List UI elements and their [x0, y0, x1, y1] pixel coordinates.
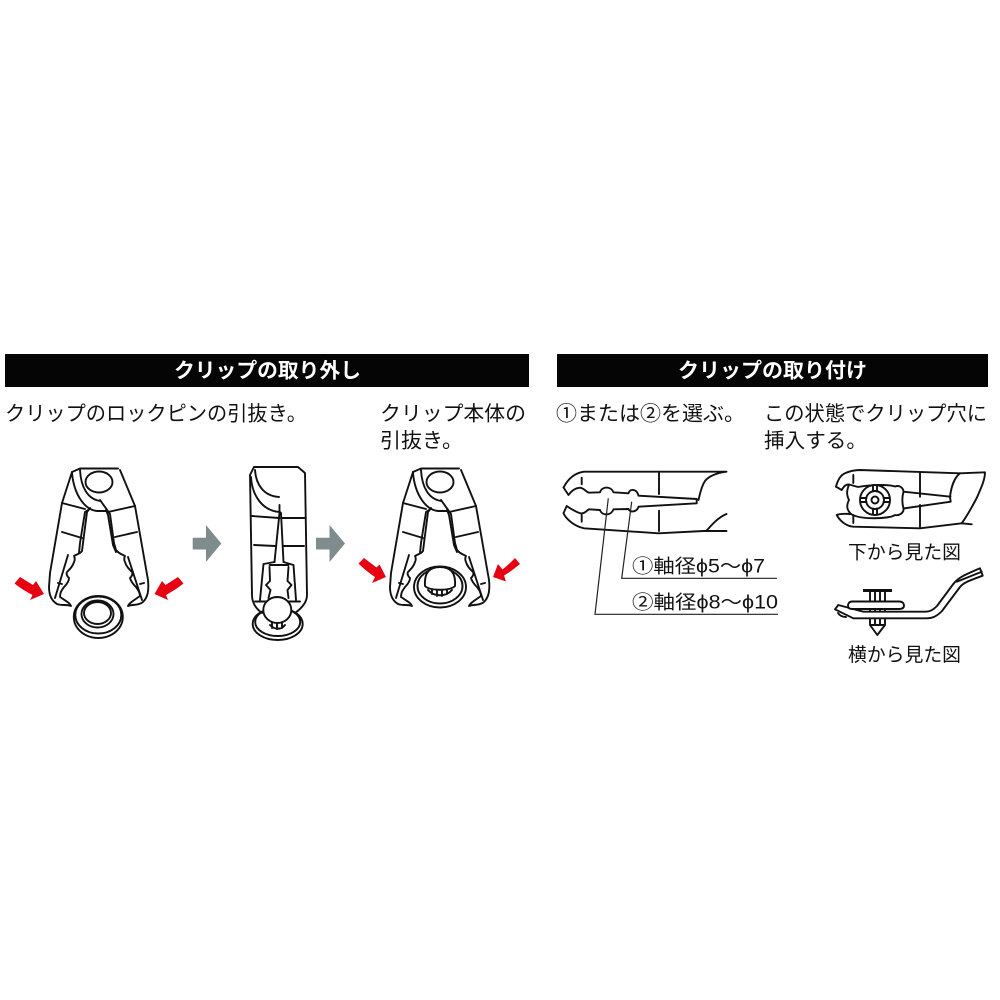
header: clip removal — [5, 354, 529, 387]
text: insert in clip hole — [764, 402, 987, 452]
arrow: red left, plier 3 — [358, 558, 386, 583]
illustration: open pliers with clip ring — [49, 468, 148, 638]
illustration: closed pliers pulling lock pin — [250, 467, 307, 640]
arrow: red right, plier 1 — [154, 577, 184, 600]
icon: clip body — [414, 566, 466, 608]
text: step 1 pull lock pin: クリップのロックピンの引抜き。 — [5, 402, 307, 426]
text: step 2 pull clip body — [380, 402, 526, 452]
text: choose 1 or 2: ①または②を選ぶ。 — [556, 402, 745, 426]
header: clip attachment — [557, 354, 988, 387]
label: diameter 2: ②軸径ϕ8～ϕ10 — [632, 592, 778, 614]
label: view from side: 横から見た図 — [848, 644, 961, 666]
text: insert in clip hole: 挿入する。 — [764, 430, 867, 452]
illustration: view from side — [835, 568, 983, 635]
arrow: red left, plier 1 — [14, 577, 44, 600]
icon: clip ring — [74, 596, 123, 638]
illustration: view from below — [836, 470, 985, 528]
header: clip removal: クリップの取り外し — [174, 360, 361, 382]
icon: clip ring under pliers — [253, 597, 303, 640]
illustration: open pliers pulling clip body — [390, 468, 489, 608]
arrow: grey step arrow 2 — [316, 525, 345, 562]
text: insert in clip hole: この状態でクリップ穴に — [764, 402, 987, 426]
arrow: red right, plier 3 — [493, 558, 520, 582]
text: step 2 pull clip body: 引抜き。 — [380, 430, 463, 452]
label: view from below: 下から見た図 — [848, 542, 961, 564]
icon: clip head from below — [860, 485, 890, 515]
label: diameter 1: ①軸径ϕ5～ϕ7 — [632, 556, 765, 578]
arrow: grey step arrow 1 — [193, 525, 221, 562]
header: clip attachment: クリップの取り付け — [678, 360, 867, 382]
text: step 2 pull clip body: クリップ本体の — [380, 402, 526, 426]
illustration: pliers side jaws with diameter leaders — [564, 472, 778, 614]
icon: clip from side — [848, 589, 904, 635]
